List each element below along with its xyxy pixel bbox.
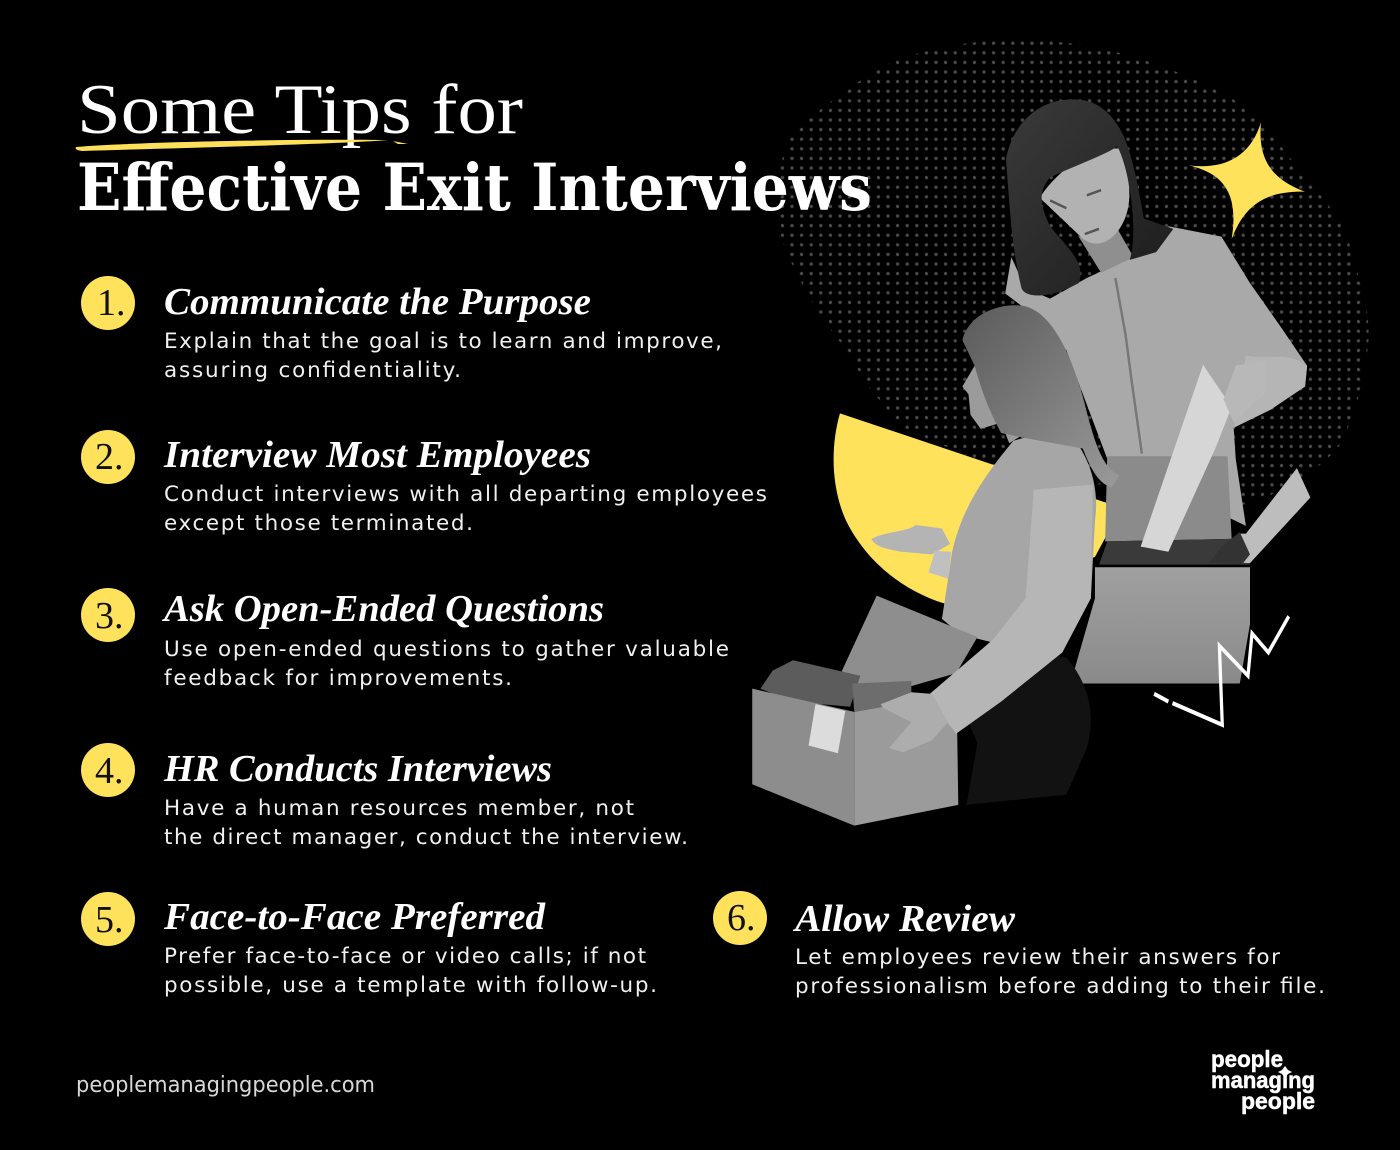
title: Some Tips for xyxy=(77,71,523,149)
tip 3 xyxy=(81,588,729,691)
tip 5 xyxy=(81,892,657,998)
logo: people xyxy=(1211,1046,1283,1072)
seated woman with box xyxy=(752,305,1119,826)
tip 6: professionalism before adding to their file. xyxy=(795,974,1325,999)
tip 6 xyxy=(713,891,1325,999)
tip 3: feedback for improvements. xyxy=(164,666,512,691)
tip 2: Interview Most Employees xyxy=(163,434,591,476)
tip 2: Conduct interviews with all departing employees xyxy=(164,482,767,507)
tip 4: the direct manager, conduct the interview. xyxy=(164,825,688,850)
badge 6: 6. xyxy=(727,897,756,939)
tip 5: Prefer face-to-face or video calls; if not xyxy=(164,944,646,969)
tip 6: Allow Review xyxy=(793,898,1016,940)
tip 1: Communicate the Purpose xyxy=(164,281,591,323)
title xyxy=(76,71,872,226)
tip 2 xyxy=(81,430,767,536)
zigzag accent xyxy=(1154,616,1289,725)
badge 3: 3. xyxy=(95,595,124,637)
yellow semicircle xyxy=(834,413,1121,603)
illustration xyxy=(752,40,1369,826)
badge 6 xyxy=(713,891,767,945)
left cardboard box xyxy=(842,596,977,686)
tip 3: Ask Open-Ended Questions xyxy=(162,588,604,630)
footer url: peoplemanagingpeople.com xyxy=(76,1073,375,1098)
badge 2: 2. xyxy=(95,436,124,478)
badge 4: 4. xyxy=(95,750,124,792)
tip 1 xyxy=(81,276,722,383)
badge 5 xyxy=(81,892,135,946)
title underline swoosh xyxy=(76,140,408,151)
right cardboard box xyxy=(1070,360,1310,683)
tip 4: Have a human resources member, not xyxy=(164,796,634,821)
tip 5: Face-to-Face Preferred xyxy=(163,896,546,938)
badge 5: 5. xyxy=(95,899,124,941)
badge 2 xyxy=(81,430,135,484)
title: Effective Exit Interviews xyxy=(77,150,872,226)
tip 3: Use open-ended questions to gather valuable xyxy=(164,637,729,662)
badge 4 xyxy=(81,743,135,797)
logo sparkle xyxy=(1278,1066,1292,1078)
tip 5: possible, use a template with follow-up. xyxy=(164,973,657,998)
badge 1 xyxy=(81,276,135,330)
logo xyxy=(1211,1046,1315,1114)
yellow sparkle star xyxy=(1189,122,1305,239)
logo: managing xyxy=(1211,1067,1315,1093)
tip 2: except those terminated. xyxy=(164,511,473,536)
tip 4: HR Conducts Interviews xyxy=(163,748,552,790)
logo: people xyxy=(1241,1088,1315,1114)
dotted blob xyxy=(778,40,1369,505)
standing woman xyxy=(1005,99,1307,526)
badge 3 xyxy=(81,588,135,642)
badge 1: 1. xyxy=(97,282,126,324)
tip 6: Let employees review their answers for xyxy=(795,945,1280,970)
tip 4 xyxy=(81,743,688,850)
tip 1: assuring confidentiality. xyxy=(164,358,461,383)
tip 1: Explain that the goal is to learn and improve, xyxy=(164,329,722,354)
